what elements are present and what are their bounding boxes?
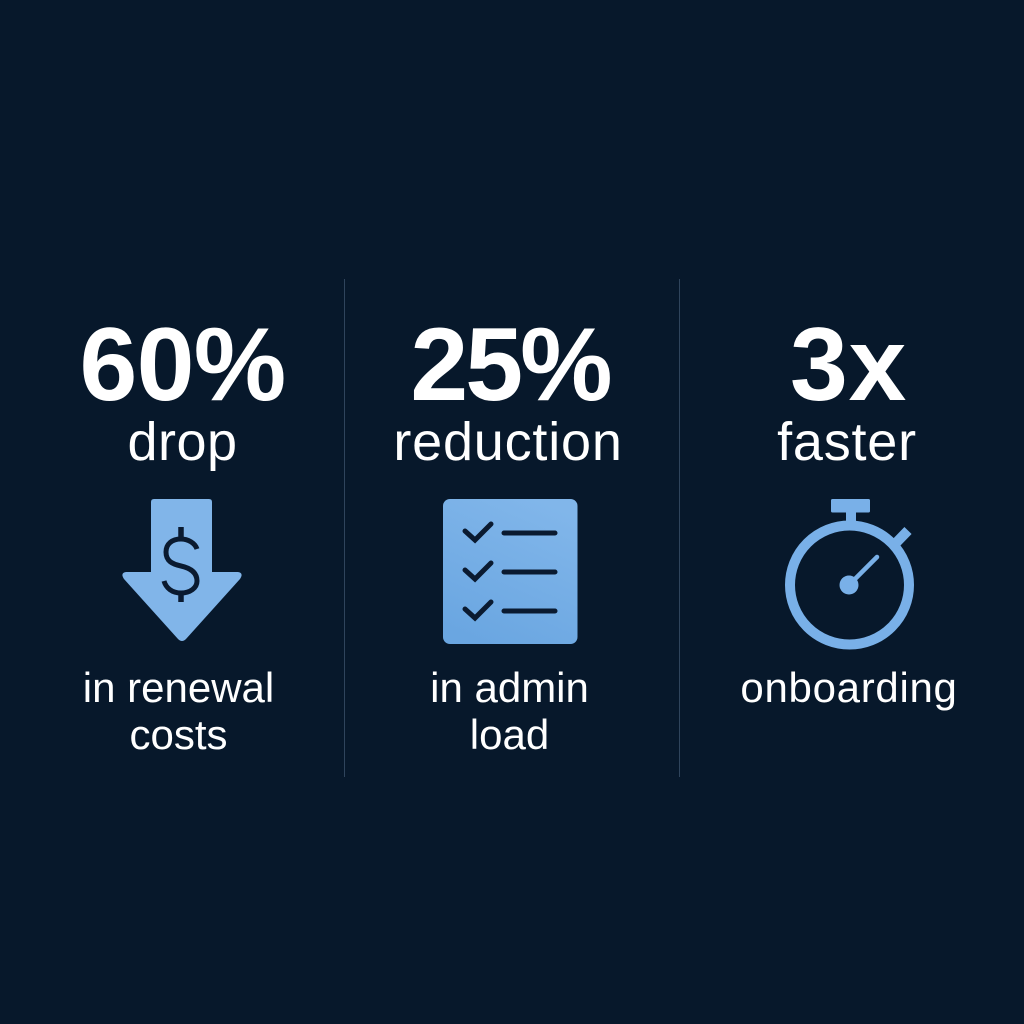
panel: admin load <box>393 307 623 758</box>
label: drop: drop <box>127 412 238 472</box>
caption: in admin load: load <box>470 711 549 758</box>
icon: stopwatch <box>785 499 914 650</box>
stat: 25%: 25% <box>410 307 610 423</box>
caption: in renewal costs: in renewal <box>83 664 274 711</box>
icon: down arrow with dollar <box>122 499 242 641</box>
icon: checklist <box>443 499 578 644</box>
caption: in renewal costs: costs <box>129 711 228 758</box>
panel: onboarding <box>740 307 958 711</box>
label: faster: faster <box>777 412 917 472</box>
caption: in admin load: in admin <box>430 664 589 711</box>
stat: 3x: 3x <box>790 307 907 423</box>
panel: renewal costs <box>79 307 286 758</box>
label: reduction: reduction <box>393 412 623 472</box>
caption: in admin load <box>430 664 589 758</box>
caption: in renewal costs <box>83 664 274 758</box>
caption: onboarding: onboarding <box>740 664 958 711</box>
stat: 60%: 60% <box>79 307 286 423</box>
